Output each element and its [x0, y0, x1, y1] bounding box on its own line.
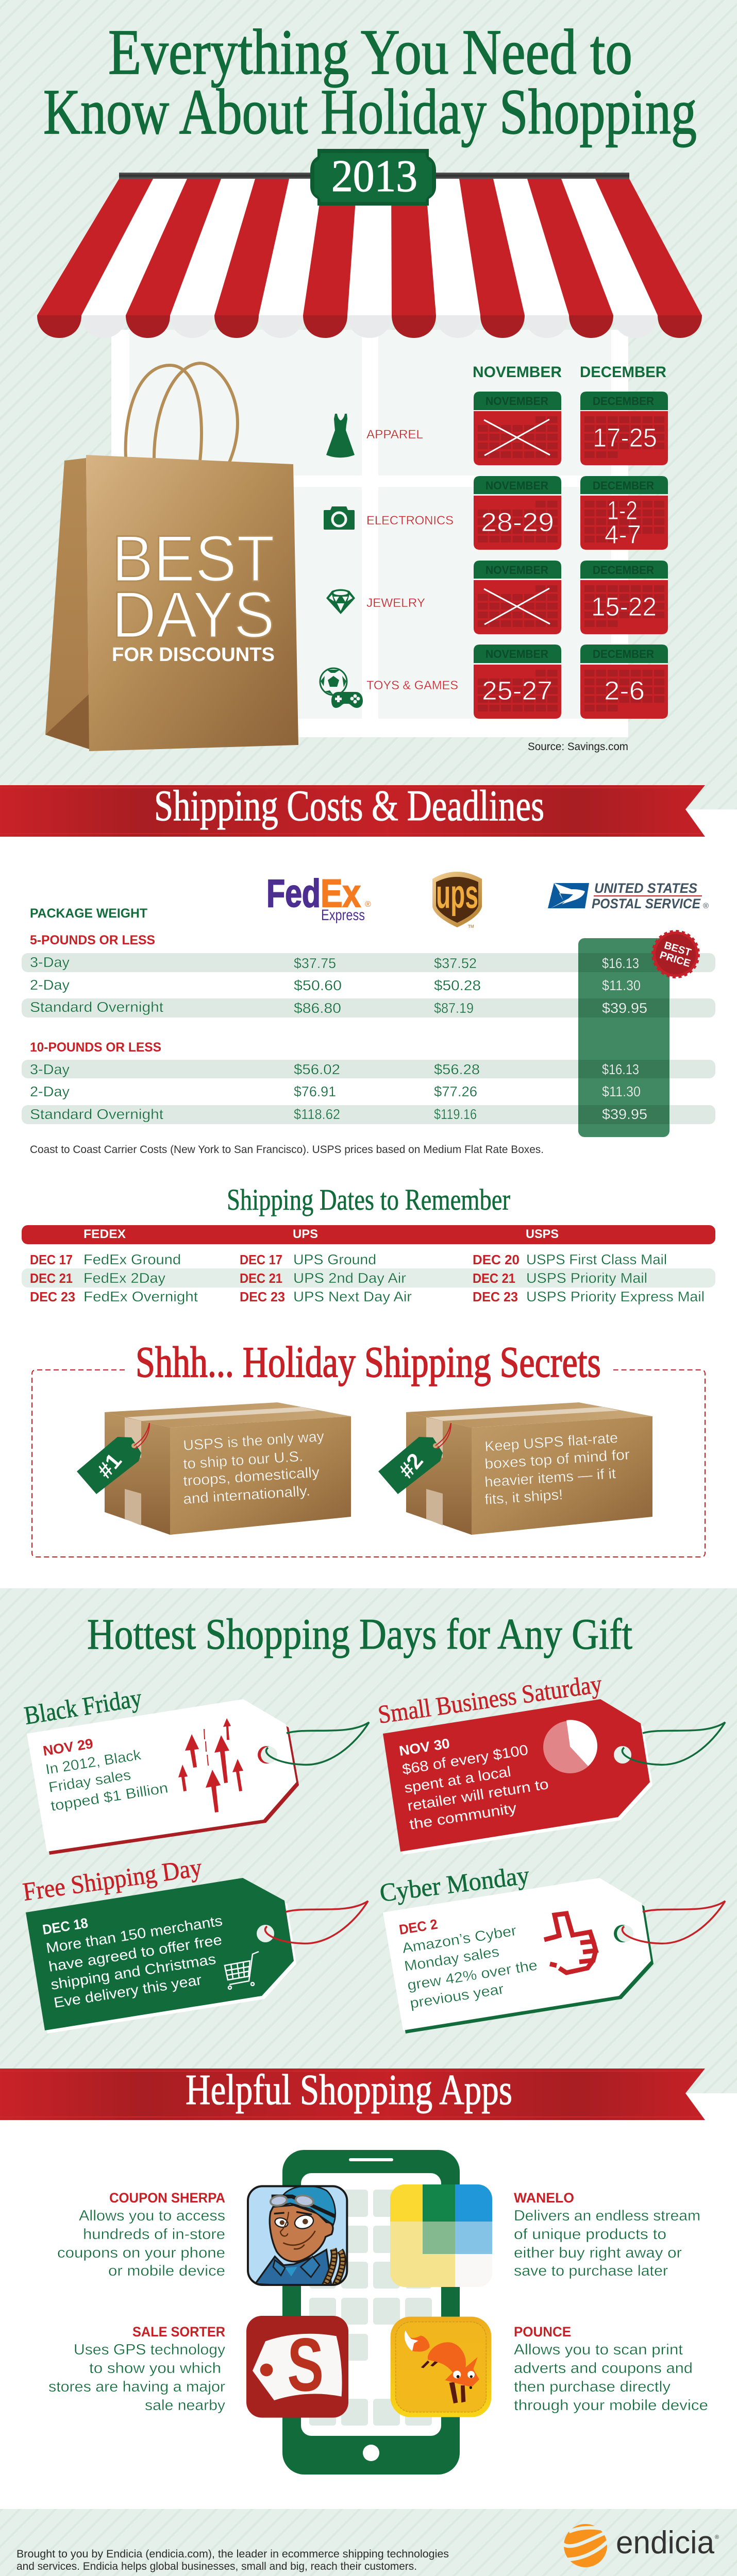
tag: small business saturday: the community [408, 1800, 517, 1833]
year sign: 2013 [331, 151, 417, 201]
logo: usps [548, 880, 709, 911]
tag: free shipping day: More than 150 merchants [45, 1912, 224, 1956]
badge: best price [653, 931, 698, 977]
calendar: apparel december 17-25: 17-25 [593, 423, 657, 452]
app text: pounce: through your mobile device [514, 2397, 708, 2414]
app text: sale sorter: SALE SORTER [132, 2324, 225, 2340]
table: shipping costs: $39.95 [602, 1000, 647, 1016]
table: shipping dates: DEC 21 [473, 1270, 515, 1286]
calendar: toys december 2-6: DECEMBER [593, 648, 654, 660]
source note: Source: Savings.com [528, 741, 628, 753]
calendar: apparel november (none): NOVEMBER [485, 395, 548, 408]
calendar: apparel december 17-25 [580, 392, 668, 465]
table: shipping costs: PACKAGE WEIGHT [30, 906, 147, 921]
table: shipping costs: 10-POUNDS OR LESS [30, 1040, 161, 1055]
table: shipping costs: $86.80 [294, 1000, 341, 1016]
app icon: sale sorter [246, 2316, 348, 2418]
banner: helpful shopping apps: Helpful Shopping Apps [186, 2066, 512, 2114]
table: shipping dates: DEC 21 [30, 1270, 73, 1286]
table: shipping dates: USPS [526, 1227, 559, 1241]
tag: free shipping day [21, 1853, 368, 2033]
app text: sale sorter: sale nearby [145, 2397, 226, 2414]
calendar: toys december 2-6: 2-6 [604, 676, 645, 705]
tag: small business saturday [376, 1669, 725, 1855]
banner: shipping costs and deadlines [0, 782, 705, 837]
shopping bag: best days for discounts: BEST [112, 522, 275, 595]
calendar: jewelry december 15-22 [580, 561, 668, 634]
table: shipping costs: $87.19 [434, 1000, 474, 1016]
table: shipping costs: $76.91 [294, 1083, 336, 1099]
logo: usps: ® [703, 902, 709, 910]
logo: fedex express: Express [321, 907, 365, 924]
calendar: apparel november (none) [474, 392, 561, 465]
table: shipping costs: 2-Day [30, 977, 70, 993]
table: shipping costs [22, 906, 715, 1137]
category: apparel: APPAREL [366, 428, 423, 442]
app text: wanelo: save to purchase later [514, 2263, 668, 2279]
table: shipping dates: DEC 17 [240, 1252, 282, 1267]
phone illustration [282, 2150, 460, 2475]
table: shipping dates: UPS Ground [293, 1251, 376, 1267]
panel: holiday shipping secrets frame [32, 1370, 705, 1557]
logo: usps: UNITED STATES [594, 880, 697, 896]
category: toys and games [320, 668, 458, 708]
calendar: toys november 25-27: NOVEMBER [485, 648, 548, 660]
table: shipping costs: $37.75 [294, 955, 336, 971]
category: jewelry [326, 589, 425, 614]
app text: coupon sherpa: Allows you to access [79, 2208, 225, 2224]
logo: usps: POSTAL SERVICE [592, 896, 701, 911]
table: shipping dates: FedEx Ground [83, 1251, 181, 1267]
table: shipping costs: $77.26 [434, 1083, 477, 1099]
title: Everything You Need to [108, 17, 632, 88]
calendar: electronics november 28-29 [474, 476, 561, 550]
table: shipping dates [22, 1225, 715, 1304]
category: apparel [326, 414, 423, 457]
heading: holiday shipping secrets: Shhh... Holiday Shipping Secrets [136, 1338, 601, 1386]
footer text: Brought to you by Endicia (endicia.com), the leader in ecommerce shipping technologies [16, 2548, 449, 2560]
table: shipping costs: 3-Day [30, 1061, 70, 1077]
banner: helpful shopping apps [0, 2066, 705, 2120]
panel: storefront window [111, 330, 628, 737]
tag: black friday: In 2012, Black [44, 1747, 143, 1777]
category: jewelry: JEWELRY [366, 596, 425, 610]
app text: wanelo [514, 2190, 700, 2279]
tag: small business saturday: Small Business Saturday [376, 1669, 604, 1729]
table: shipping costs: $118.62 [294, 1106, 340, 1122]
app text: coupon sherpa: hundreds of in-store [83, 2226, 225, 2243]
calendar: jewelry november (none) [474, 561, 561, 634]
footer text [16, 2548, 449, 2572]
table: shipping dates: UPS 2nd Day Air [293, 1270, 406, 1286]
title [43, 17, 697, 148]
banner: shipping costs and deadlines: Shipping Costs & Deadlines [154, 782, 544, 830]
category: toys and games: TOYS & GAMES [366, 679, 458, 692]
table: shipping costs: $11.30 [602, 1083, 641, 1099]
calendar: apparel december 17-25: DECEMBER [593, 395, 654, 408]
shopping bag: best days for discounts: FOR DISCOUNTS [112, 644, 275, 666]
table footnote: Coast to Coast Carrier Costs (New York to San Francisco). USPS prices based on Medium Flat Rate Boxes. [30, 1144, 544, 1156]
tag: black friday: Black Friday [22, 1683, 144, 1730]
tag: cyber monday: grew 42% over the [406, 1957, 539, 1993]
category: electronics: ELECTRONICS [366, 514, 454, 528]
tag: free shipping day: DEC 18 [41, 1915, 89, 1938]
table: shipping costs: $11.30 [602, 977, 641, 993]
tag: cyber monday [378, 1860, 725, 2033]
secret box 1: #1 [92, 1449, 126, 1483]
secret box 1: and internationally. [182, 1483, 311, 1507]
app text: coupon sherpa [57, 2190, 225, 2279]
table: shipping costs: $56.02 [294, 1061, 340, 1077]
logo: endicia: endicia [616, 2525, 714, 2561]
table: shipping costs: $50.60 [294, 977, 342, 993]
table: shipping costs: Standard Overnight [30, 1106, 163, 1122]
app text: sale sorter: stores are having a major [48, 2379, 225, 2395]
tag: free shipping day: Eve delivery this year [53, 1972, 203, 2011]
tag: free shipping day: have agreed to offer free [47, 1931, 223, 1975]
logo: fedex express: Fed [266, 872, 321, 916]
app icon: sale sorter: S [287, 2323, 324, 2407]
table: shipping dates: FedEx 2Day [83, 1270, 165, 1286]
footer text: and services. Endicia helps global businesses, small and big, reach their customers. [16, 2561, 417, 2572]
table: shipping dates: FEDEX [83, 1227, 126, 1241]
app text: sale sorter: Uses GPS technology [74, 2342, 226, 2358]
table: shipping costs: 3-Day [30, 954, 70, 970]
app text: pounce: Allows you to scan print [514, 2342, 683, 2358]
app text: pounce [514, 2324, 708, 2414]
table: shipping dates: UPS Next Day Air [293, 1289, 412, 1304]
calendar: jewelry december 15-22: 15-22 [591, 592, 657, 621]
tag: cyber monday: Cyber Monday [378, 1860, 531, 1907]
table: shipping costs: Standard Overnight [30, 999, 163, 1015]
app icon: wanelo [390, 2184, 492, 2287]
tag: small business saturday: NOV 30 [398, 1736, 451, 1759]
calendar: electronics december 1-2 and 4-7: 1-2 [607, 496, 638, 525]
calendar: electronics november 28-29: NOVEMBER [485, 479, 548, 492]
table: shipping dates: USPS Priority Express Mail [526, 1289, 705, 1304]
app icon: coupon sherpa [248, 2186, 347, 2287]
table: shipping costs: $39.95 [602, 1106, 647, 1122]
app text: wanelo: Delivers an endless stream [514, 2208, 700, 2224]
logo: ups shield [432, 871, 482, 929]
app text: sale sorter [48, 2324, 226, 2414]
table: shipping costs: $16.13 [602, 1061, 639, 1077]
app text: pounce: adverts and coupons and [514, 2360, 693, 2377]
app text: pounce: then purchase directly [514, 2379, 671, 2395]
secret box 2: boxes top of mind for [484, 1446, 630, 1472]
table: shipping costs: 5-POUNDS OR LESS [30, 933, 155, 947]
calendar: toys november 25-27: 25-27 [482, 676, 552, 705]
table: shipping dates: DEC 17 [30, 1252, 73, 1267]
logo: fedex express: Ex [321, 872, 361, 916]
month column headings [473, 364, 666, 381]
tag: black friday [22, 1683, 369, 1855]
year sign [310, 149, 436, 206]
secret box 1: to ship to our U.S. [182, 1448, 304, 1472]
app text: sale sorter: to show you which [89, 2360, 221, 2377]
secret box 2: heavier items — if it [484, 1465, 616, 1490]
secret box 1 [77, 1402, 351, 1535]
secret box 2: #2 [394, 1449, 428, 1483]
tag: black friday: topped $1 Billion [49, 1780, 169, 1814]
app text: wanelo: either buy right away or [514, 2245, 682, 2261]
heading: shipping dates to remember: Shipping Dates to Remember [227, 1183, 510, 1216]
table: shipping dates: DEC 23 [30, 1289, 75, 1304]
tag: small business saturday: spent at a local [403, 1764, 512, 1796]
table: shipping costs: $56.28 [434, 1061, 480, 1077]
category: electronics [324, 506, 454, 530]
app icon: pounce [391, 2317, 491, 2417]
table: shipping costs: $119.16 [434, 1106, 477, 1122]
logo: ups shield: ups [436, 871, 478, 917]
awning [37, 173, 702, 338]
secret box 2: fits, it ships! [484, 1486, 563, 1507]
calendar: jewelry november (none): NOVEMBER [485, 564, 548, 577]
app text: wanelo: of unique products to [514, 2226, 666, 2243]
calendar: electronics november 28-29: 28-29 [481, 507, 554, 537]
tag: cyber monday: DEC 2 [398, 1917, 439, 1938]
calendar: jewelry december 15-22: DECEMBER [593, 564, 654, 577]
logo: endicia [563, 2524, 719, 2567]
tag: black friday: NOV 29 [42, 1736, 94, 1759]
logo: fedex express: ® [365, 900, 371, 909]
calendar: electronics december 1-2 and 4-7: 4-7 [605, 520, 641, 549]
table: shipping dates: USPS First Class Mail [526, 1251, 667, 1267]
calendar: toys december 2-6 [580, 645, 668, 719]
month column headings: DECEMBER [580, 364, 666, 381]
tag: cyber monday: previous year [409, 1981, 505, 2011]
secret box 1: troops, domestically [182, 1464, 320, 1489]
table: shipping dates: DEC 23 [473, 1289, 518, 1304]
app text: pounce: POUNCE [514, 2324, 571, 2340]
secret box 2: Keep USPS flat-rate [484, 1430, 618, 1454]
secret box 1: USPS is the only way [182, 1428, 325, 1453]
tag: free shipping day: Free Shipping Day [21, 1853, 204, 1906]
logo: ups shield: TM [468, 924, 474, 929]
table: shipping dates: DEC 20 [473, 1252, 520, 1267]
logo: endicia: ® [715, 2534, 719, 2540]
logo: fedex express [266, 872, 371, 924]
month column headings: NOVEMBER [473, 364, 562, 381]
table: shipping dates: FedEx Overnight [83, 1289, 198, 1304]
app text: coupon sherpa: COUPON SHERPA [109, 2190, 225, 2206]
shopping bag: best days for discounts: DAYS [112, 578, 275, 651]
table: shipping costs: 2-Day [30, 1083, 70, 1099]
table: shipping dates: USPS Priority Mail [526, 1270, 647, 1286]
app text: coupon sherpa: or mobile device [108, 2263, 225, 2279]
tag: small business saturday: retailer will return to [406, 1776, 550, 1814]
heading: hottest shopping days: Hottest Shopping Days for Any Gift [87, 1610, 632, 1658]
tag: cyber monday: Monday sales [403, 1943, 500, 1974]
table: shipping dates: DEC 21 [240, 1270, 282, 1286]
tag: cyber monday: Amazon’s Cyber [401, 1922, 517, 1956]
table: shipping costs: $37.52 [434, 955, 477, 971]
tag: black friday: Friday sales [47, 1767, 132, 1795]
table: shipping costs: $50.28 [434, 977, 481, 993]
calendar: toys november 25-27 [474, 645, 561, 719]
badge: best price: BEST [663, 940, 692, 959]
app text: wanelo: WANELO [514, 2190, 574, 2206]
table: shipping dates: UPS [293, 1227, 318, 1241]
table: shipping dates: DEC 23 [240, 1289, 285, 1304]
calendar: electronics december 1-2 and 4-7: DECEMBER [593, 479, 654, 492]
tag: small business saturday: $68 of every $100 [401, 1742, 529, 1777]
secret box 2 [378, 1402, 652, 1535]
badge: best price: PRICE [658, 950, 692, 970]
shopping bag: best days for discounts [45, 363, 298, 751]
app text: coupon sherpa: coupons on your phone [57, 2245, 225, 2261]
table: shipping costs: $16.13 [602, 955, 639, 971]
tag: free shipping day: shipping and Christmas [49, 1951, 217, 1993]
calendar: electronics december 1-2 and 4-7 [580, 476, 668, 550]
